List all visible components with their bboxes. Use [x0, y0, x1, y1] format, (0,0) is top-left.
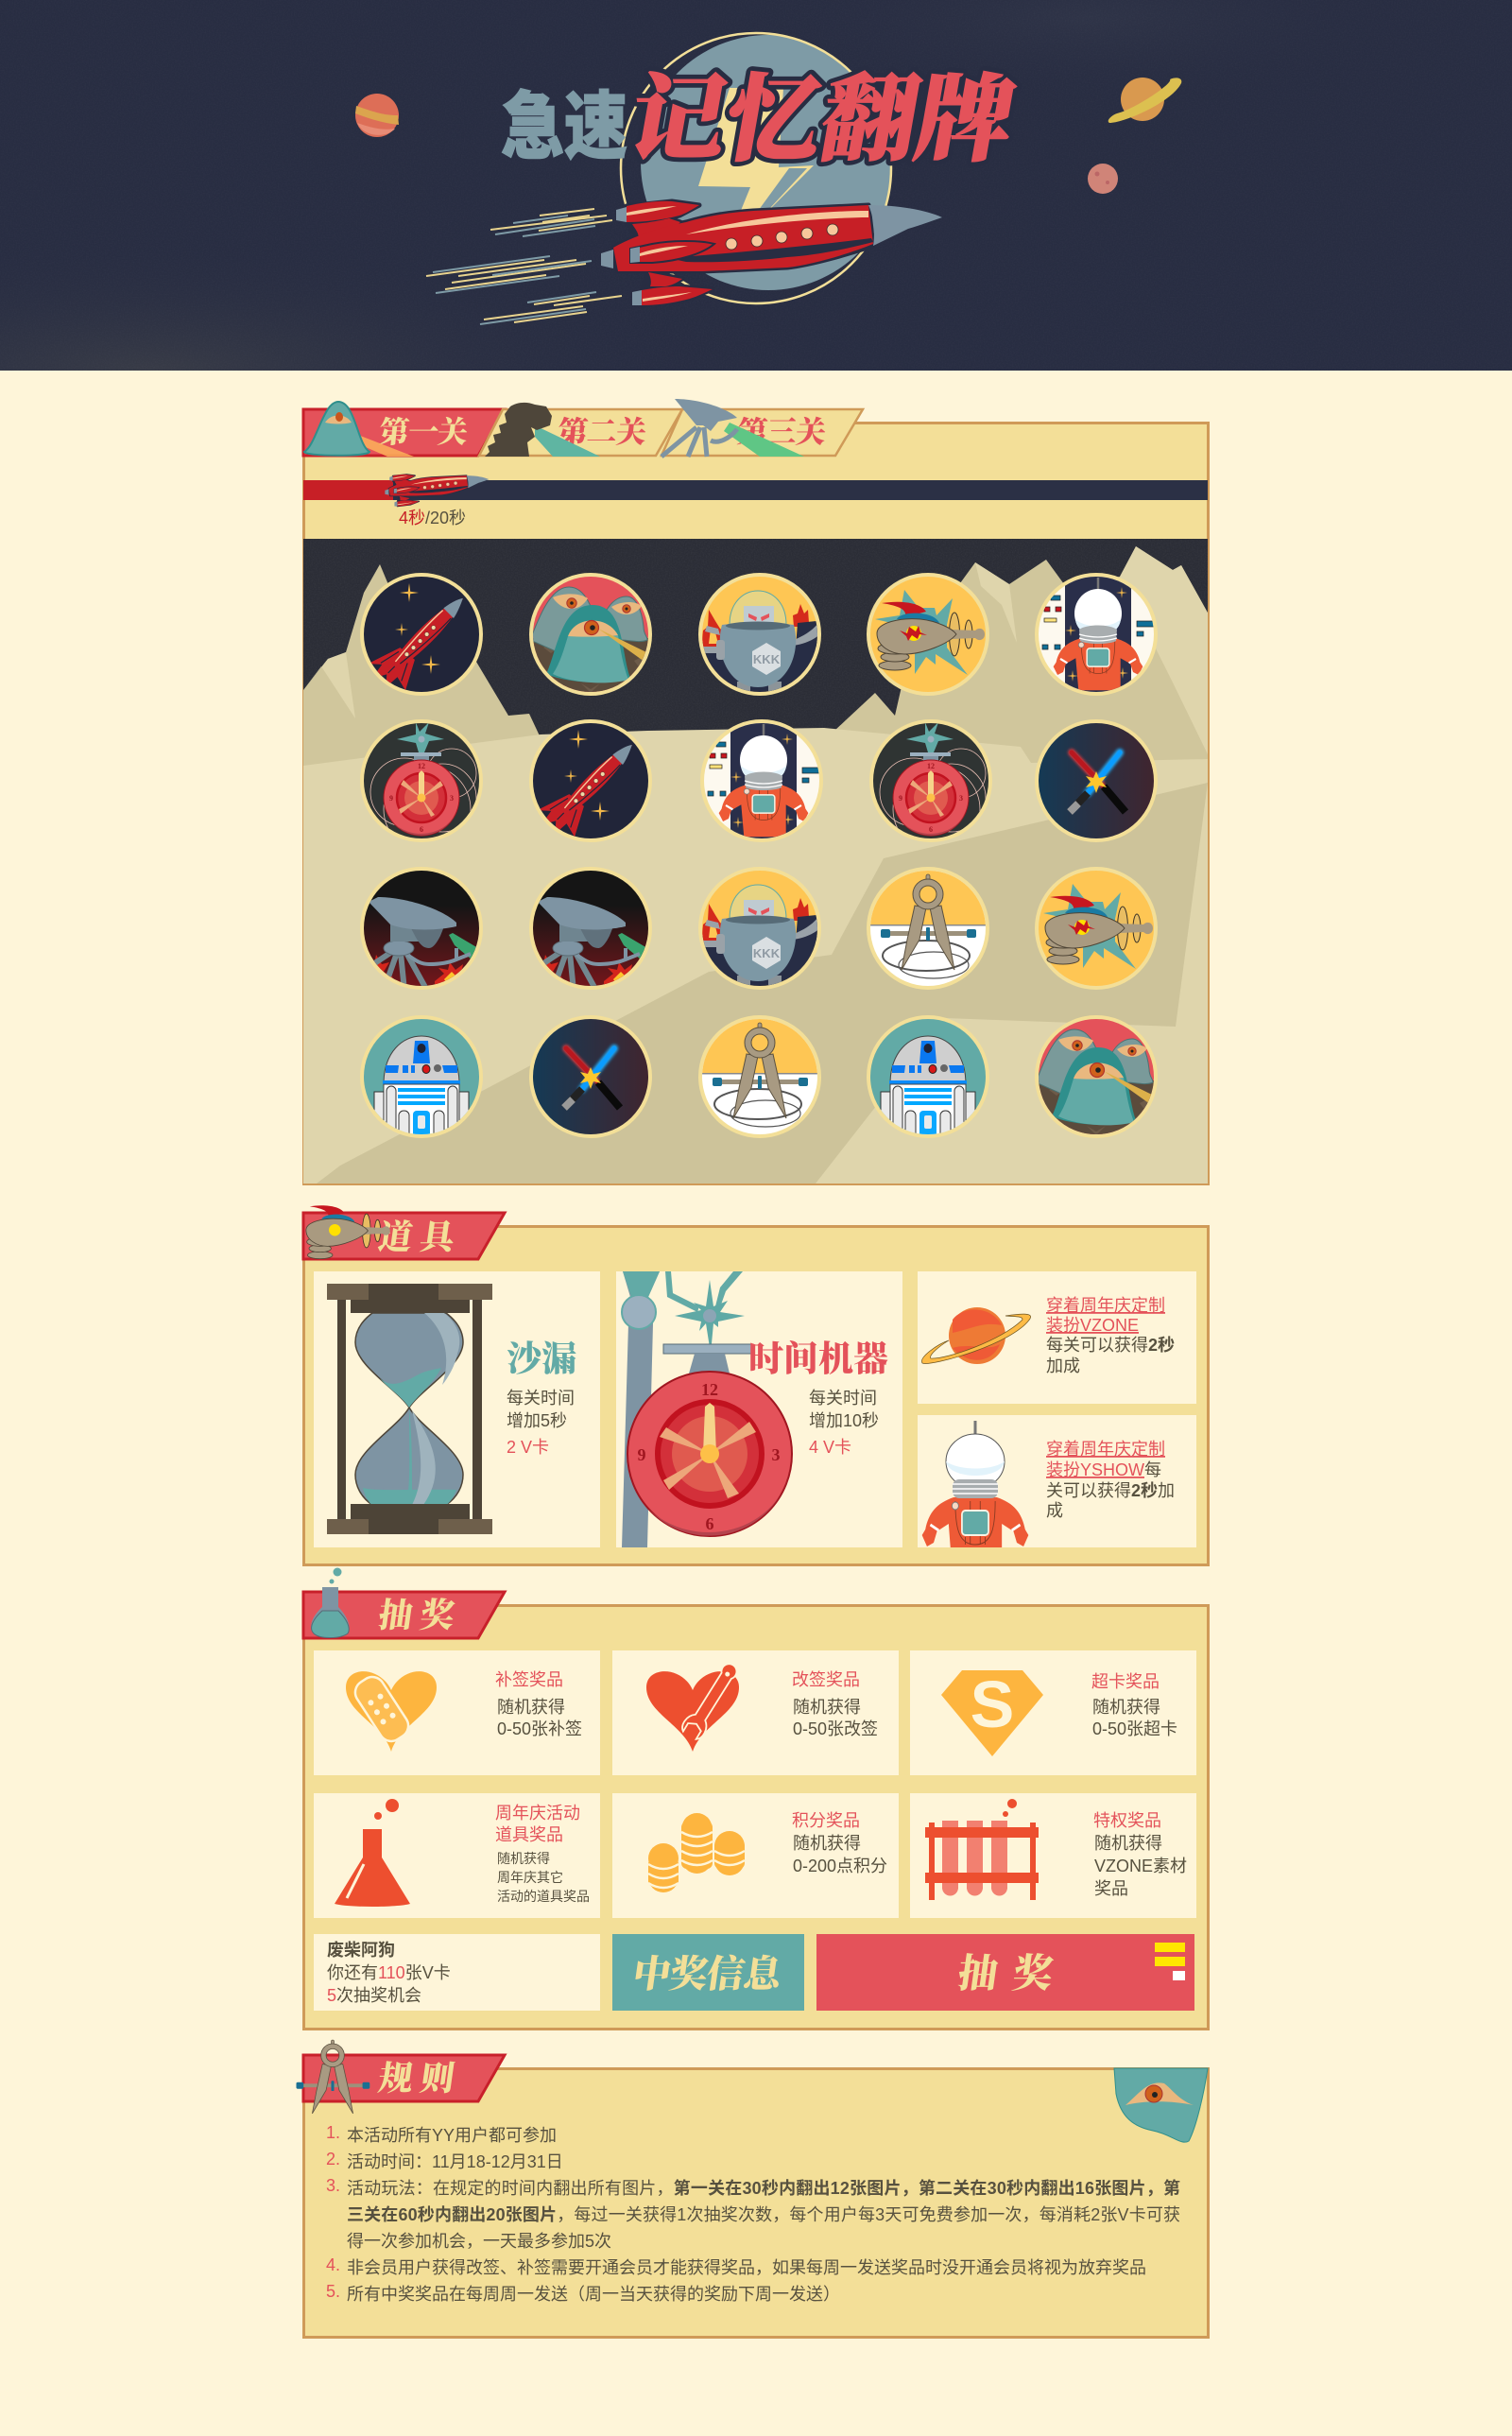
tab: level 3: 第三关 [735, 415, 828, 449]
user info [314, 1934, 600, 2011]
prize: anniversary items [314, 1793, 600, 1918]
icon: astronaut [922, 1421, 1028, 1547]
card: astronaut [1035, 573, 1158, 696]
user info: 你还有110张V卡 [327, 1963, 451, 1982]
heading: hourglass: 沙漏 [507, 1339, 576, 1379]
heading: time machine: 时间机器 [748, 1339, 888, 1379]
title: 急速: 急速 [501, 85, 627, 168]
banner: rules [297, 2040, 505, 2114]
banner: lottery: 抽 奖 [376, 1597, 456, 1634]
card: astronaut [700, 719, 823, 842]
hero rocket [601, 201, 942, 305]
card: compass [867, 867, 989, 990]
icon: heart with bandage [346, 1671, 437, 1752]
prize text: 随机获得 [793, 1698, 861, 1717]
prize text: 随机获得 [1094, 1834, 1162, 1853]
banner: lottery [303, 1567, 505, 1638]
rule list: 活动时间：11月18-12月31日 [347, 2152, 563, 2171]
row 1 cards [360, 573, 1158, 701]
prize text: 0-50张超卡 [1092, 1719, 1177, 1738]
prize text: 道具奖品 [495, 1825, 563, 1844]
row 4 cards [360, 1015, 1158, 1139]
item text: 成 [1046, 1501, 1063, 1520]
rule list: 三关在60秒内翻出20张图片，每过一关获得1次抽奖次数，每个用户每3天可免费参加一次，每消耗2张V卡可获 [347, 2205, 1180, 2224]
prize: super card [910, 1650, 1196, 1775]
card: ray gun [1035, 867, 1158, 990]
prize text [495, 1804, 590, 1904]
icon: ray gun [306, 1205, 390, 1259]
rule list: 得一次参加机会，一天最多参加5次 [347, 2232, 611, 2251]
banner: items [303, 1205, 505, 1259]
item text: 2 V卡 [507, 1438, 549, 1457]
card: robot [698, 573, 822, 699]
panel: items [303, 1205, 1208, 1567]
prize: points [612, 1793, 899, 1918]
item text: 每关时间 [507, 1389, 575, 1408]
prize text: 改签奖品 [792, 1670, 860, 1689]
icon: progress rocket [385, 475, 489, 507]
item text: 每关时间 [809, 1389, 877, 1408]
prize text: 随机获得 [1092, 1698, 1160, 1717]
prize: make-up sign [314, 1650, 600, 1775]
icon: coin stacks [648, 1813, 745, 1892]
row 2 cards [360, 719, 1158, 853]
item text: 增加5秒 [507, 1411, 567, 1430]
icon: heart with wrench [646, 1659, 742, 1752]
prize text: 随机获得 [793, 1834, 861, 1853]
item text: 装扮YSHOW每 [1046, 1460, 1161, 1479]
card: rocket [529, 719, 652, 848]
rule list: 4. [326, 2255, 340, 2274]
rule list: 1. [326, 2123, 340, 2142]
card: compass [698, 1015, 821, 1138]
button: winners [612, 1934, 804, 2011]
panel: levels [303, 399, 1209, 1185]
item text: 加成 [1046, 1356, 1080, 1375]
card: YSHOW outfit [918, 1415, 1196, 1547]
item text [809, 1389, 879, 1457]
prize text: 周年庆其它 [497, 1870, 563, 1885]
prize text: 0-50张补签 [497, 1719, 582, 1738]
card: droid [867, 1015, 989, 1139]
card: robot [698, 867, 822, 993]
icon: ringed planet [921, 1307, 1031, 1364]
rule list [326, 2123, 1180, 2304]
tab: level 1: 第一关 [377, 415, 470, 449]
icon: S shield: S [971, 1667, 1014, 1741]
icon: time machine: 12 [701, 1380, 718, 1399]
prize text [1093, 1811, 1187, 1898]
rule list: 本活动所有YY用户都可参加 [347, 2126, 557, 2145]
user info: 废柴阿狗 [327, 1940, 395, 1960]
title: 记忆翻牌: 记忆翻牌 [622, 68, 1023, 173]
banner: items: 道 具 [376, 1218, 463, 1256]
prize text: 随机获得 [497, 1698, 565, 1717]
rule list: 3. [326, 2176, 340, 2195]
planet small [1088, 164, 1118, 194]
prize text: 特权奖品 [1093, 1811, 1161, 1830]
prize text: 超卡奖品 [1091, 1672, 1160, 1691]
card: light sabers [1035, 719, 1158, 842]
prize text [792, 1670, 878, 1738]
tab: level 1 [303, 409, 505, 456]
item text [1046, 1440, 1175, 1520]
timer text: 4秒/20秒 [399, 509, 466, 527]
prize text: 0-50张改签 [793, 1719, 878, 1738]
card: hourglass [314, 1271, 600, 1547]
prize text [1091, 1672, 1177, 1738]
prize: privilege [910, 1793, 1196, 1918]
prize text: 活动的道具奖品 [497, 1889, 590, 1904]
prize text: 周年庆活动 [495, 1804, 580, 1823]
tab: level 2: 第二关 [556, 415, 648, 449]
card: time machine [616, 1271, 902, 1547]
button: draw: 抽 奖 [955, 1952, 1056, 1996]
banner: rules: 规 则 [376, 2060, 456, 2098]
speed lines [426, 209, 622, 324]
prize text: 0-200点积分 [793, 1857, 887, 1875]
icon: compass [297, 2040, 369, 2114]
item text: 每关可以获得2秒 [1046, 1336, 1175, 1355]
planet ringed [1108, 78, 1181, 123]
item text [1046, 1296, 1175, 1375]
game board [303, 537, 1209, 1185]
button: draw [816, 1934, 1194, 2011]
icon: corner hood [1114, 2068, 1208, 2142]
button: winners: 中奖信息 [630, 1953, 788, 1995]
panel: lottery [303, 1567, 1208, 2029]
item text: 装扮VZONE [1046, 1316, 1139, 1335]
prize text: 补签奖品 [495, 1670, 563, 1689]
card: rocket [360, 573, 483, 701]
icon: hourglass [327, 1284, 492, 1534]
card: droid [360, 1015, 483, 1139]
prize text: 随机获得 [497, 1851, 550, 1866]
card: time machine [360, 719, 483, 853]
icon: time machine: 3 [771, 1445, 781, 1464]
rule list: 2. [326, 2150, 340, 2168]
card: tripod [529, 867, 652, 991]
rule list: 活动玩法：在规定的时间内翻出所有图片，第一关在30秒内翻出12张图片，第二关在30秒内翻出16张图片，第 [347, 2178, 1180, 2198]
planet left [355, 94, 399, 137]
icon: flask [311, 1567, 350, 1637]
tab: level 2 [479, 409, 682, 456]
icon: time machine: 9 [637, 1445, 646, 1464]
prize text: 奖品 [1094, 1879, 1128, 1898]
rule list: 非会员用户获得改签、补签需要开通会员才能获得奖品，如果每周一发送奖品时没开通会员将视为放弃奖品 [347, 2258, 1146, 2277]
icon: monster [485, 403, 600, 457]
panel: rules [297, 2040, 1208, 2337]
prize text [792, 1811, 887, 1875]
prize: correction sign [612, 1650, 899, 1775]
item text [507, 1389, 575, 1457]
progress bar [303, 475, 1208, 507]
icon: time machine: 6 [705, 1514, 714, 1533]
card: hooded eyes [529, 573, 652, 697]
prize text: VZONE素材 [1094, 1857, 1187, 1875]
item text: 穿着周年庆定制 [1046, 1296, 1165, 1315]
icon: time machine [622, 1271, 792, 1547]
emblem circle [621, 33, 896, 303]
prize text [495, 1670, 582, 1738]
icon: flask [335, 1799, 410, 1907]
rule list: 5. [326, 2282, 340, 2301]
tab: level 3 [662, 409, 863, 456]
rule list: 所有中奖奖品在每周周一发送（周一当天获得的奖励下周一发送） [347, 2285, 840, 2304]
item text: 4 V卡 [809, 1438, 851, 1457]
card: light sabers [529, 1015, 652, 1138]
icon: tripod [662, 399, 804, 457]
card: VZONE outfit [918, 1271, 1196, 1404]
card: ray gun [867, 573, 989, 696]
user info: 5次抽奖机会 [327, 1986, 421, 2005]
icon: test tubes [925, 1799, 1039, 1900]
card: time machine [869, 719, 992, 853]
title: 记忆翻牌: 记忆翻牌 [622, 68, 1023, 173]
item text: 关可以获得2秒加 [1046, 1481, 1175, 1500]
row 3 cards [360, 867, 1158, 993]
icon: hooded eye [304, 402, 414, 457]
card: hooded eyes [1035, 1015, 1158, 1139]
item text: 增加10秒 [809, 1411, 879, 1430]
icon: S shield [941, 1667, 1043, 1756]
prize text: 积分奖品 [792, 1811, 860, 1830]
item text: 穿着周年庆定制 [1046, 1440, 1165, 1459]
card: tripod [360, 867, 483, 991]
header banner [0, 0, 1512, 371]
